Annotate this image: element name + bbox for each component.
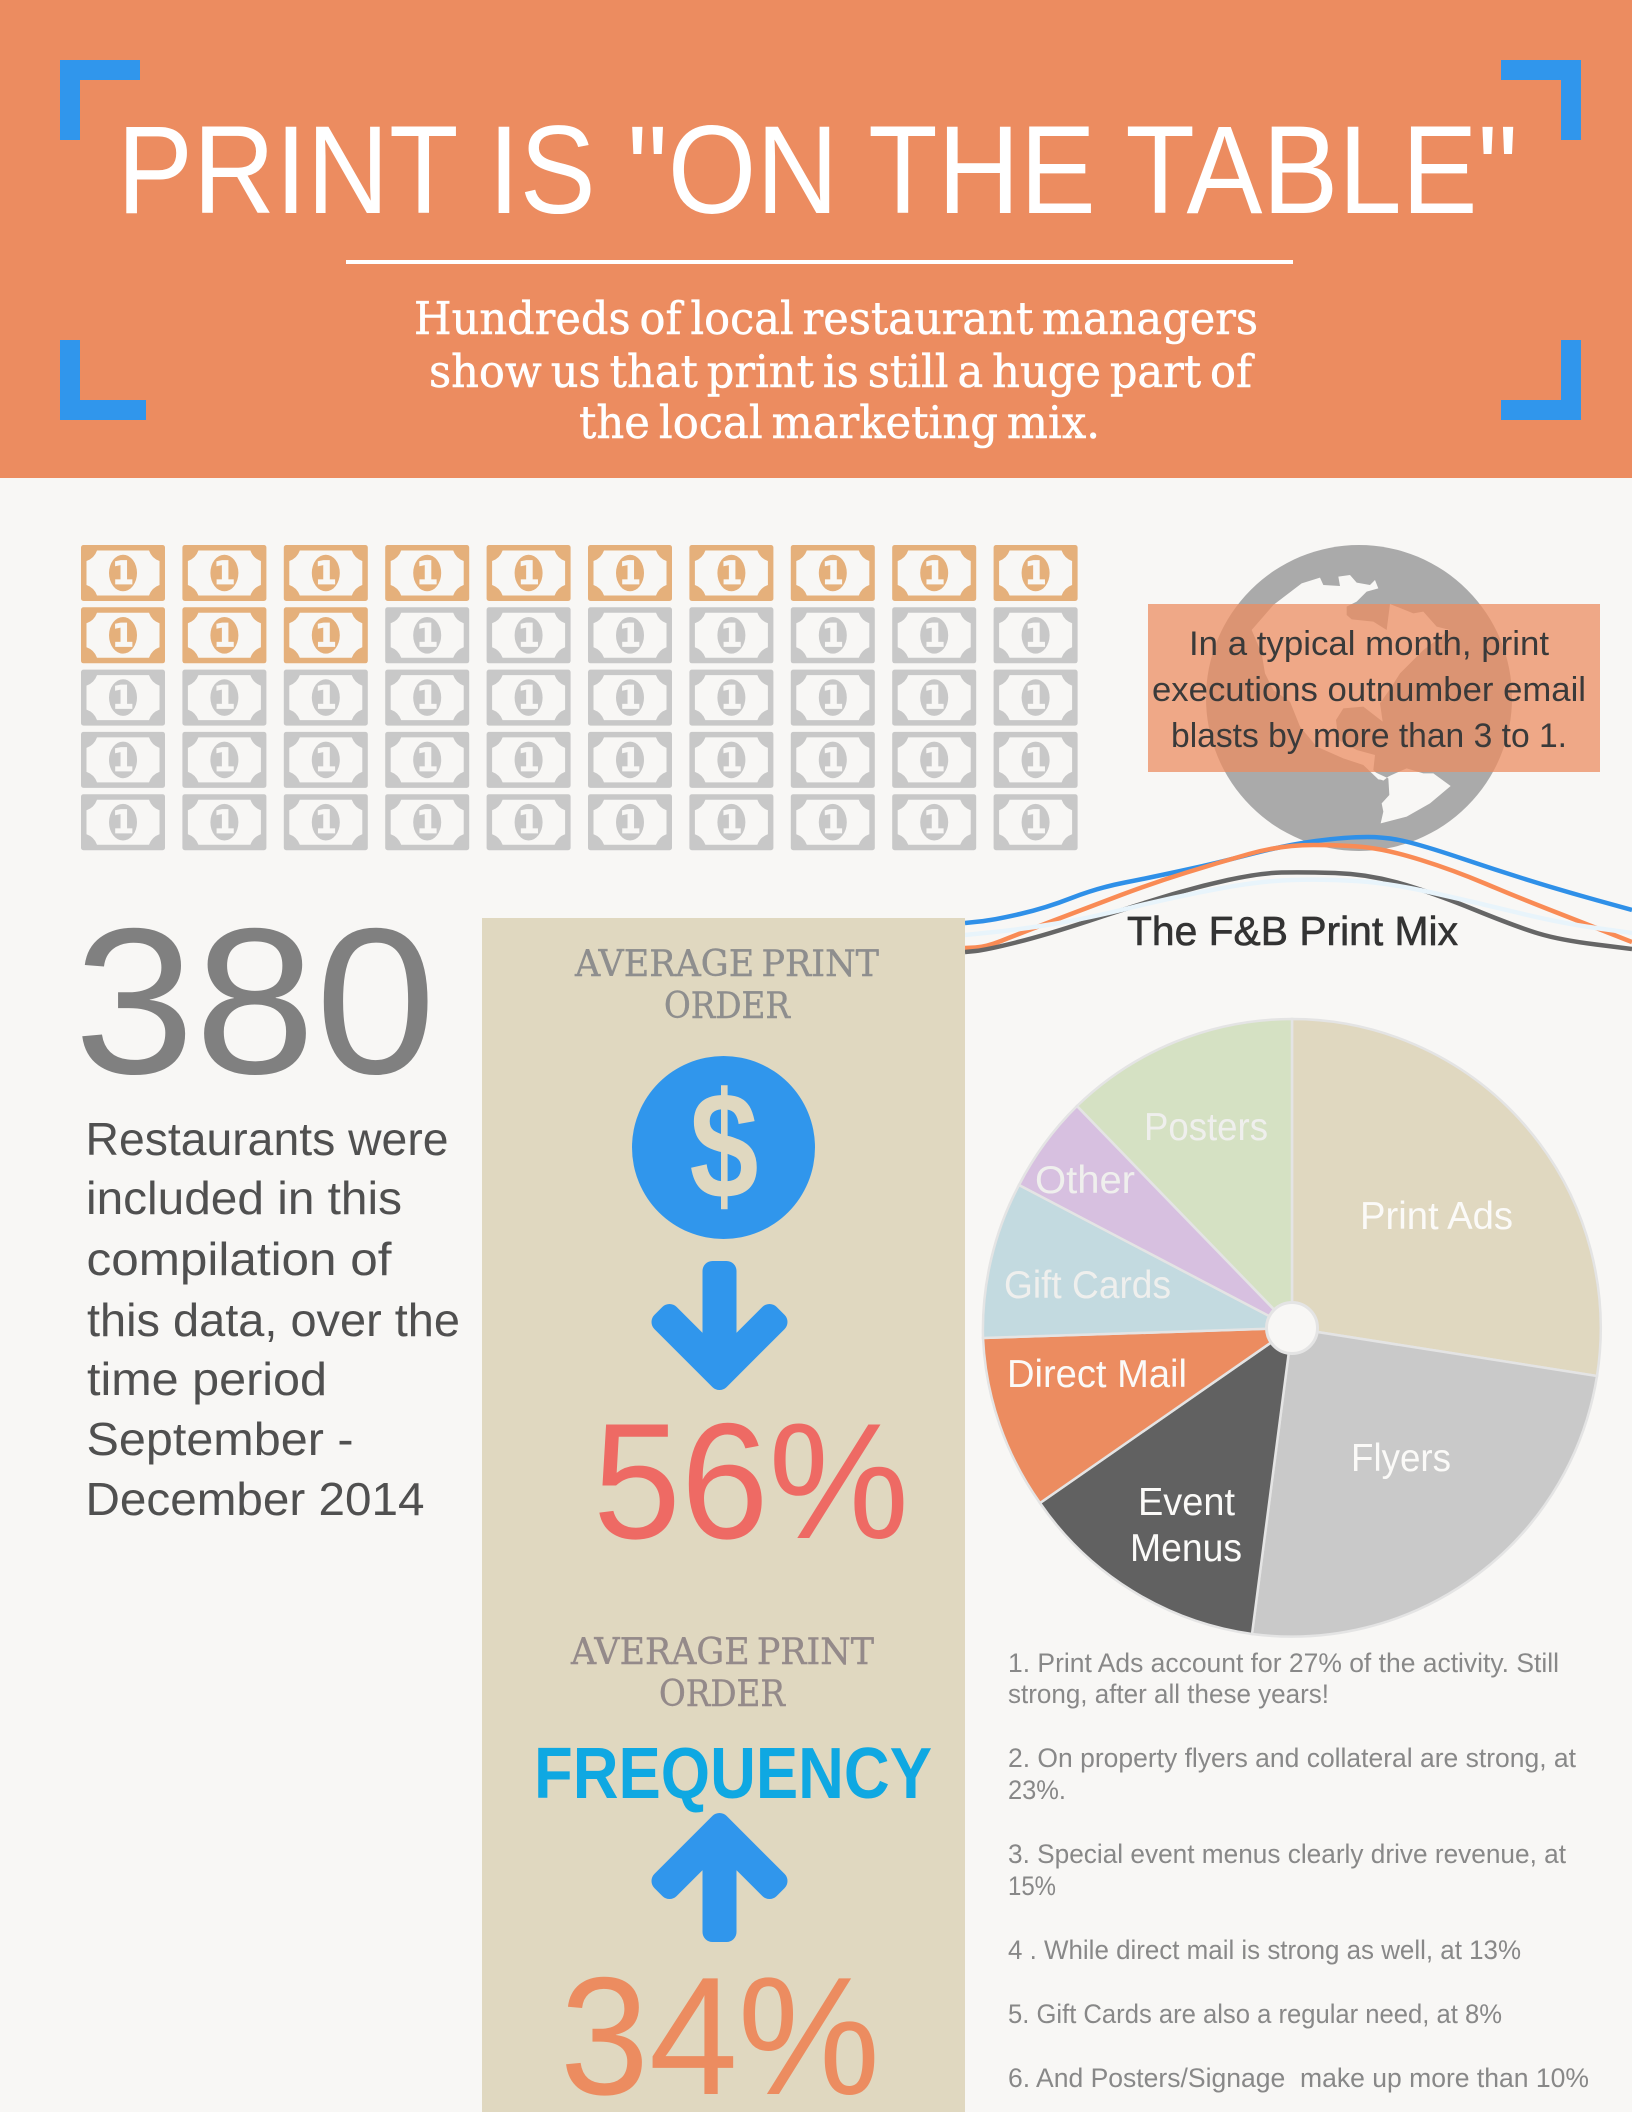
icon: dollar coin: $ (690, 1061, 758, 1231)
pie labels: Other (1035, 1159, 1135, 1202)
text block: restaurants description: this data, over the (87, 1294, 460, 1346)
text block: restaurants description: Restaurants were (86, 1113, 448, 1165)
icon: globe (1206, 545, 1512, 851)
stat: 380 restaurants: 380 (74, 886, 436, 1118)
row of bills 1 (81, 545, 1078, 663)
panel: header banner (0, 0, 1632, 478)
callout: print versus email: executions outnumber email (1152, 671, 1586, 709)
subtitle (414, 292, 1258, 449)
heading: average print order frequency: ORDER (659, 1674, 786, 1715)
icon: corner brackets (60, 60, 1581, 420)
subtitle: the local marketing mix. (579, 396, 1100, 449)
text block: restaurants description: September - (86, 1413, 354, 1465)
text block: print mix findings: strong, after all these years! (1008, 1679, 1329, 1709)
pie labels: Posters (1144, 1106, 1268, 1149)
pie labels: Event (1138, 1481, 1235, 1524)
chart: money bill pictogram grid: 1111111111 (112, 679, 1047, 717)
panel: average print order (482, 918, 965, 2112)
icon: dollar coin (632, 1056, 815, 1239)
pie labels: Print Ads (1360, 1195, 1513, 1238)
chart: money bill pictogram grid: 1111111111 (112, 803, 1047, 841)
pie labels (1004, 1106, 1513, 1570)
text block: print mix findings: 4 . While direct mail is strong as well, at 13% (1008, 1935, 1521, 1965)
heading: average print order cost (574, 944, 879, 1027)
subtitle: show us that print is still a huge part of (429, 345, 1255, 398)
callout: print versus email: blasts by more than 3 to 1. (1171, 717, 1567, 755)
text block: restaurants description: compilation of (86, 1233, 392, 1285)
heading: average print order cost: ORDER (664, 986, 791, 1027)
chart: pie of print mix (983, 1019, 1601, 1637)
label: frequency: FREQUENCY (534, 1734, 932, 1814)
pie labels: Direct Mail (1007, 1353, 1187, 1396)
callout: print versus email: In a typical month, print (1189, 625, 1550, 663)
text block: print mix findings: 15% (1008, 1871, 1056, 1901)
chart: money bill pictogram grid: 1111111111 (112, 554, 1047, 592)
text block: print mix findings: 2. On property flyers and collateral are strong, at (1008, 1743, 1576, 1773)
pie labels: Gift Cards (1004, 1264, 1171, 1307)
arrow: down (662, 1271, 778, 1380)
text block: restaurants description: December 2014 (86, 1473, 424, 1525)
text block: print mix findings: 1. Print Ads account for 27% of the activity. Still (1008, 1648, 1559, 1678)
text block: restaurants description (86, 1113, 460, 1525)
heading: average print order frequency (570, 1632, 874, 1715)
row of gray bills (81, 607, 1078, 850)
callout: print versus email (1148, 604, 1600, 772)
heading: average print order cost: AVERAGE PRINT (574, 944, 879, 985)
decorative wave lines (965, 837, 1632, 952)
text block: restaurants description: included in this (86, 1172, 402, 1224)
arrow: up (662, 1823, 778, 1932)
heading: the F&B print mix: The F&B Print Mix (1127, 908, 1458, 954)
text block: restaurants description: time period (87, 1353, 327, 1405)
pie labels: Menus (1130, 1527, 1242, 1570)
pie labels: Flyers (1351, 1437, 1451, 1480)
text block: print mix findings: 5. Gift Cards are also a regular need, at 8% (1008, 1999, 1502, 2029)
subtitle: Hundreds of local restaurant managers (414, 292, 1258, 345)
chart: money bill pictogram grid: 1111111111 (112, 616, 1047, 654)
stat: 56 percent: 56% (593, 1389, 909, 1573)
stat: 380 restaurants (74, 886, 460, 1525)
text block: print mix findings: 23%. (1008, 1775, 1066, 1805)
title: PRINT IS "ON THE TABLE" (117, 101, 1518, 240)
chart: money bill pictogram grid (81, 545, 1078, 850)
text block: print mix findings: 3. Special event menus clearly drive revenue, at (1008, 1839, 1566, 1869)
chart: money bill pictogram grid: 1111111111 (112, 741, 1047, 779)
text block: print mix findings (1008, 1648, 1589, 2093)
text block: print mix findings: 6. And Posters/Signage make up more than 10% (1008, 2063, 1589, 2093)
heading: average print order frequency: AVERAGE PRINT (570, 1632, 874, 1673)
